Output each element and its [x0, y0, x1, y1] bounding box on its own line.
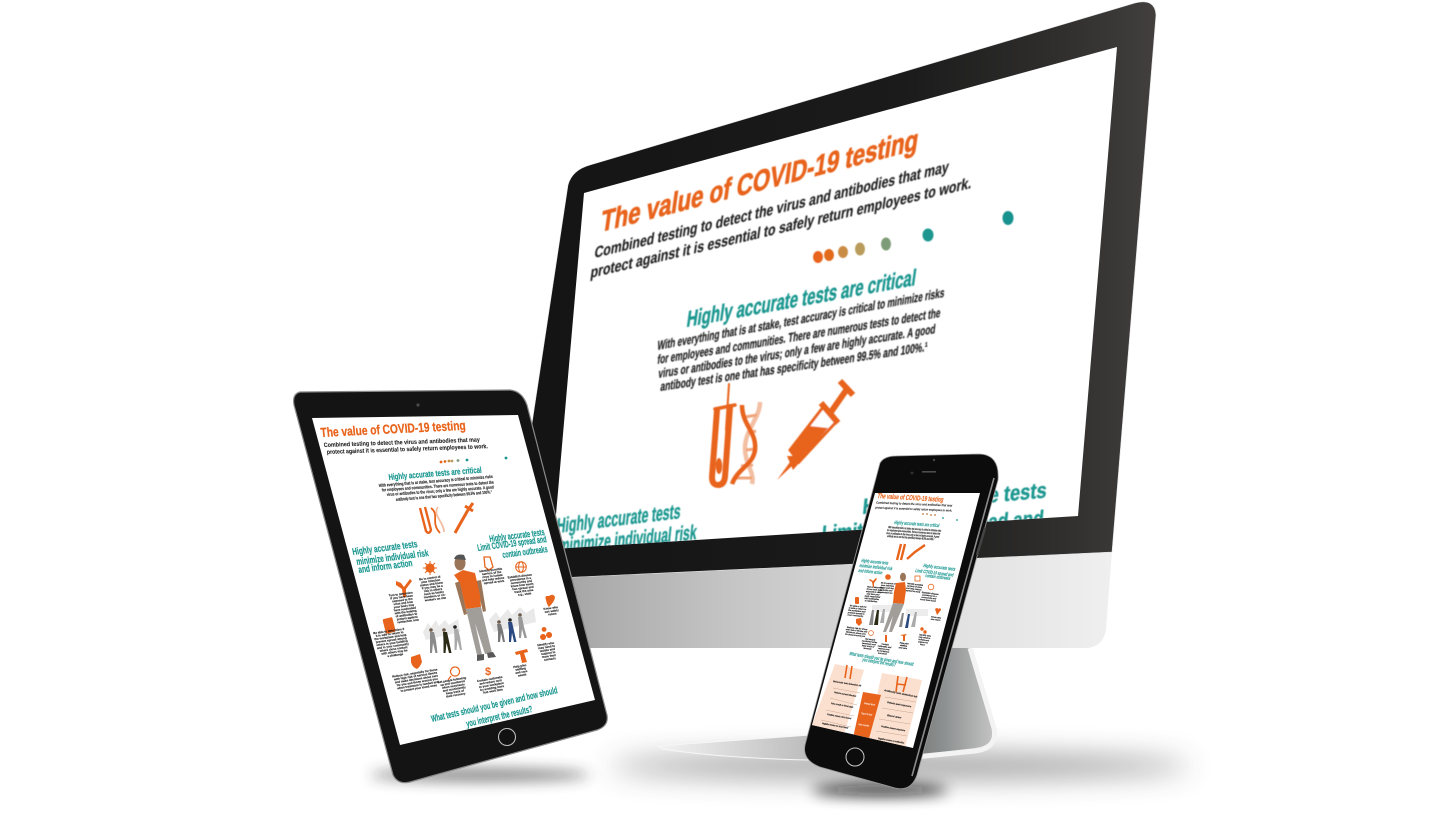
tablet text blocks: up and monitored: [440, 679, 465, 687]
heading: limit spread: [822, 483, 1047, 532]
table text lines: Molecular test detection kit: [833, 680, 862, 687]
tablet text blocks: for you and those around you: [396, 677, 438, 687]
tablet text blocks: when treatment is needed and: [396, 680, 439, 690]
tablet text blocks: Know who: [543, 605, 559, 611]
table text lines: Negative means no virus found: [822, 722, 849, 730]
tablet dots: [440, 457, 507, 463]
phone speaker and camera: [911, 459, 936, 474]
centre column labels: Type of test: [861, 712, 873, 717]
phone small people: [869, 609, 917, 628]
phone text blocks: your community: [847, 613, 864, 618]
tablet city skyline: [423, 607, 536, 640]
heading: minimize individual risk: minimize individual risk: [558, 521, 698, 558]
tablet body paragraph: With everything that is at stake, test accuracy is critical to minimize risks: [378, 474, 494, 488]
tablet icons: [382, 557, 555, 680]
phone text blocks: Identify possible: [907, 582, 924, 587]
monitor screen content: [556, 123, 1048, 558]
phone heading left: [857, 558, 893, 576]
tablet text blocks: has spread and: [512, 585, 534, 591]
phone text blocks: prevalence in a: [922, 593, 938, 598]
tablet text blocks: such as family: [423, 590, 445, 596]
phone text blocks: staffing: [899, 644, 908, 648]
tablet text blocks: have responded: [393, 606, 417, 612]
phone text blocks: if you have been: [866, 589, 883, 592]
phone bottom question: you interpret the results?: [861, 657, 896, 669]
phone heading right: contain outbreaks: [924, 573, 951, 582]
icon: building: [382, 617, 396, 634]
tablet text blocks: by avoiding more: [480, 684, 505, 692]
tablet text blocks: to your workplace: [478, 681, 505, 689]
phone title: The value of COVID-19 testing: [877, 492, 944, 504]
phone text blocks: monitored when: [861, 639, 878, 644]
phone text blocks: Establish disease: [921, 591, 940, 596]
tablet text blocks: staffing: [515, 666, 526, 672]
phone text blocks: [844, 581, 942, 656]
phone text blocks: isolate and: [918, 638, 930, 642]
icon: magnifier: [448, 667, 460, 680]
tablet text blocks: [372, 567, 560, 699]
tablet screen: [312, 415, 595, 745]
tablet text blocks: protect against: [396, 615, 418, 621]
phone text blocks: prevent spread in: [847, 611, 866, 616]
phone text blocks: exposed to virus: [865, 590, 883, 594]
tablet heading critical: Highly accurate tests are critical: [388, 465, 482, 482]
tablet bottom question: you interpret the results?: [465, 704, 534, 730]
tablet text blocks: where close contact: [378, 645, 408, 653]
tablet subtitle: protect against it is essential to safely return employees to work.: [327, 443, 488, 456]
centre column labels: Test results: [858, 723, 870, 728]
phone text blocks: decisions about care: [845, 630, 867, 636]
tablet heading right: Limit COVID-19 spread and: [476, 534, 548, 553]
table text lines: [822, 680, 918, 745]
tablet text blocks: the workplace and help: [374, 633, 407, 641]
icon: sample collection: [484, 557, 493, 570]
centre column labels: [858, 702, 876, 728]
tablet text blocks: with high risk of serious illness: [392, 671, 438, 682]
phone body paragraph: virus or antibodies to the virus; only a few are highly accurate. A good: [886, 531, 940, 539]
tablet text blocks: with others may be: [380, 648, 408, 656]
phone side highlight: [912, 478, 994, 776]
phone text blocks: to reinfection: [864, 599, 878, 603]
phone text blocks: support to: [918, 640, 929, 645]
tablet camera: [416, 403, 420, 407]
icon: DNA helix: [732, 402, 760, 484]
body paragraph: virus or antibodies to the virus; only a few are highly accurate. A good: [658, 321, 936, 381]
tablet text blocks: Identify who: [537, 641, 555, 647]
phone person: [883, 573, 906, 632]
right test column: [866, 673, 922, 752]
phone text blocks: can return: [930, 618, 941, 622]
icon: heart: [545, 595, 555, 607]
tablet text blocks: if you may be a: [421, 584, 443, 590]
phone text blocks: with antibodies: [864, 597, 880, 601]
tablet text blocks: Test to determine: [388, 590, 414, 598]
tablet text blocks: carriers of the: [481, 570, 502, 576]
tablet body: [294, 390, 607, 783]
tablet text blocks: isolate and: [539, 647, 556, 653]
tablet text blocks: trace their: [541, 653, 557, 659]
phone subtitle: Combined testing to detect the virus and antibodies that may: [876, 501, 953, 508]
phone bottom question: [848, 651, 914, 669]
tablet screen content: [320, 418, 560, 730]
tablet heading right: contain outbreaks: [501, 544, 548, 560]
phone text blocks: Know who: [931, 616, 942, 620]
tablet text blocks: contacts: [543, 656, 557, 662]
tablet text blocks: your body may: [393, 603, 415, 609]
monitor chin: [556, 550, 1112, 648]
phone text blocks: carriers of virus: [906, 584, 923, 589]
tablet text blocks: their recovery: [446, 691, 466, 699]
phone icons: [855, 574, 941, 642]
tablet text blocks: and consistently: [442, 685, 466, 693]
subtitle: Combined testing to detect the virus and antibodies that may: [593, 158, 950, 262]
body paragraph: With everything that is at stake, test accuracy is critical to minimize risks: [657, 285, 945, 353]
phone text blocks: Be in control of: [880, 581, 896, 586]
monitor screen: [553, 47, 1117, 549]
phone body: [805, 454, 998, 789]
tablet text blocks: needs: [517, 672, 527, 678]
tablet text blocks: status and know: [420, 581, 444, 587]
tablet text blocks: to protect your loved ones: [400, 683, 438, 693]
phone subtitle: [875, 501, 953, 513]
tablet text blocks: virus and how: [393, 600, 414, 606]
decorative dots row: [813, 211, 1014, 263]
phone text blocks: your infection: [880, 584, 895, 588]
phone text blocks: Contain: [881, 643, 890, 647]
phone text blocks: community and: [921, 596, 937, 601]
phone text blocks: may need to: [918, 636, 931, 640]
tablet heading right: [477, 529, 548, 558]
tablet text blocks: a challenge: [387, 652, 404, 658]
icon: antibody: [396, 579, 412, 597]
tablet: [294, 390, 607, 783]
phone text blocks: spread at work: [906, 589, 921, 594]
table icons: [845, 665, 907, 692]
tablet text blocks: prevalence in a: [510, 576, 532, 582]
heading: minimize individual risk: [557, 504, 698, 548]
tablet title: The value of COVID-19 testing: [320, 418, 466, 440]
phone heading right: Highly accurate tests: [922, 563, 956, 573]
phone text blocks: Be able to tell if it: [849, 604, 867, 609]
icon: test tube with swab: [712, 384, 735, 485]
shadows under devices: [370, 755, 1190, 796]
centre column labels: Detection: [864, 702, 876, 707]
tablet text blocks: virus to isolate: [482, 573, 503, 579]
tablet text blocks: Be in control of: [419, 575, 441, 581]
tablet text blocks: return: [548, 611, 557, 617]
tablet text blocks: Identify possible: [479, 567, 503, 573]
monitor bezel: [531, 2, 1156, 578]
icon: tools: [515, 649, 528, 663]
tablet bottom question: [430, 685, 559, 730]
tablet text blocks: Be able to determine if: [373, 627, 405, 635]
table text lines: Detects past exposure: [887, 701, 912, 708]
monitor stand: [658, 640, 995, 760]
tablet text blocks: workers on site: [423, 596, 447, 602]
body paragraph: for employees and communities. There are numerous tests to detect the: [657, 305, 941, 367]
phone text blocks: and care: [898, 646, 908, 650]
phone text blocks: to workplace: [877, 649, 890, 654]
tablet heading left: [352, 541, 430, 573]
tablet body paragraph: virus or antibodies to the virus; only a few are highly accurate. A good: [386, 485, 494, 497]
phone text blocks: co-workers too: [878, 591, 894, 595]
phone text blocks: Reduce risk for those: [847, 626, 869, 631]
heading: limit spread: Highly accurate tests: [862, 478, 1048, 519]
tablet text blocks: with the making: [393, 609, 417, 616]
phone side button: [977, 528, 985, 555]
icon: dollar: $: [485, 666, 491, 678]
phone heading left: minimize individual risk: [858, 563, 893, 572]
table text lines: Negative means no antibodies: [878, 737, 905, 745]
phone text blocks: to family and: [880, 588, 893, 592]
title: The value of COVID-19 testing: [599, 123, 921, 239]
tablet text blocks: when necessary: [441, 682, 465, 690]
body paragraph: antibody test is one that has specificity between 99.5% and 100%.¹: [660, 339, 928, 394]
phone icon: syringe: [907, 545, 925, 559]
tablet text blocks: of antibodies to: [395, 612, 418, 618]
tablet text blocks: prevent spread among: [375, 636, 407, 644]
tablet text blocks: reinfection now: [397, 618, 420, 624]
phone text blocks: body responded: [864, 596, 881, 599]
phone text blocks: and how your: [866, 593, 880, 596]
table cell dividers: [821, 688, 916, 736]
tablet text blocks: risk to others: [423, 587, 443, 593]
tablet text blocks: e.g., state: [517, 591, 532, 597]
phone screen content: [810, 492, 958, 752]
tablet text blocks: spread at work: [483, 579, 505, 585]
tablet text blocks: and care: [515, 669, 528, 675]
icon: globe: [516, 562, 526, 572]
phone text blocks: outbreaks and: [877, 644, 892, 649]
phone home button: [846, 748, 864, 766]
table text lines: Blood draw: [887, 714, 902, 720]
tablet text blocks: others in your building: [376, 639, 408, 647]
tablet text blocks: keep track of: [446, 689, 464, 695]
tablet text blocks: can safely: [544, 608, 559, 614]
left test column: [810, 664, 864, 740]
tablet heading left: Highly accurate tests: [351, 539, 419, 558]
tablet small people: [429, 613, 527, 653]
phone text blocks: status and risk: [879, 586, 895, 590]
tablet text blocks: and help reduce: [482, 576, 505, 582]
tablet text blocks: members or co-: [423, 593, 446, 599]
icon: syringe: [777, 381, 853, 480]
tablet text blocks: Establish disease: [507, 573, 533, 579]
phone text blocks: Test to determine: [867, 585, 885, 590]
tablet person: [454, 554, 496, 661]
tablet text blocks: lost work time: [483, 687, 504, 695]
phone heading right: Limit COVID-19 spread and: [914, 568, 954, 579]
tablet text blocks: support to: [541, 650, 556, 656]
tablet subtitle: [324, 437, 488, 456]
tablet text blocks: community and: [510, 579, 533, 585]
icon: virus: [423, 561, 437, 575]
tablet body paragraph: for employees and communities. There are numerous tests to detect the: [381, 480, 495, 492]
centre orange column: [853, 692, 881, 742]
phone text blocks: lost work: [878, 652, 888, 656]
phone skyline: [872, 605, 928, 616]
tablet heading left: minimize individual risk: [355, 548, 430, 568]
phone text blocks: recovery: [863, 647, 873, 651]
tablet subtitle: Combined testing to detect the virus and antibodies that may: [324, 437, 481, 449]
tablet text blocks: Help plan: [513, 663, 527, 669]
phone icon: tube, DNA: [897, 544, 905, 560]
table text lines: Detects current infection: [834, 691, 857, 698]
tablet icon: tube and DNA: [420, 507, 444, 533]
phone text blocks: Identify who: [919, 633, 932, 638]
phone heading left: and inform action: [857, 568, 883, 576]
phone text blocks: is safe to return to: [848, 606, 867, 611]
tablet text blocks: Get people following: [437, 676, 467, 684]
phone text blocks: necessary and: [861, 642, 877, 646]
phone heading right: [914, 563, 956, 582]
tablet text blocks: and reduce cost: [479, 678, 502, 686]
phone heading critical: Highly accurate tests are critical: [894, 520, 940, 529]
phone body paragraph: antibody test is one that has specificity between 99.5% and 100%.¹: [887, 534, 935, 541]
phone text blocks: Get people: [865, 637, 877, 642]
tablet icon: syringe: [455, 503, 473, 533]
phone body paragraph: [886, 525, 942, 541]
tablet bottom question: What tests should you be given and how should: [430, 685, 559, 725]
tablet text blocks: Reduce risk, especially for those: [392, 667, 438, 679]
tablet text blocks: and make decisions about care: [394, 674, 439, 684]
phone body paragraph: With everything that is at stake, test accuracy is critical to minimize risks: [888, 525, 942, 533]
tablet text blocks: it is safe to return to: [375, 630, 404, 638]
tablet text blocks: your infection: [420, 578, 441, 584]
tablet heading left: and inform action: [357, 558, 414, 576]
monitor: [531, 2, 1156, 648]
tablet text blocks: may need to: [538, 644, 556, 650]
tablet text blocks: track the area: [514, 588, 534, 594]
phone text blocks: the workplace and: [848, 609, 867, 614]
phone text blocks: for those around you: [845, 633, 866, 638]
table text lines: Nose, mouth or throat swab: [831, 702, 854, 709]
phone text blocks: know how much: [920, 599, 937, 603]
tablet home button: [498, 728, 516, 746]
phone body paragraph: for employees and communities. There are numerous tests to detect the: [887, 528, 941, 536]
heading: tests are critical: Highly accurate tests are critical: [685, 264, 918, 332]
phone: [805, 454, 998, 789]
icon: people network: [540, 627, 552, 640]
body paragraph: [657, 285, 945, 394]
phone text blocks: keep track of: [861, 644, 875, 649]
tablet text blocks: know how much: [510, 582, 534, 588]
table text lines: Positive means exposure: [881, 725, 906, 732]
tablet body paragraph: [378, 474, 495, 502]
tablet text blocks: and in your community: [376, 642, 410, 650]
phone heading left: Highly accurate tests: [860, 558, 889, 567]
tablet heading right: Highly accurate tests: [488, 527, 545, 544]
table text lines: Antibody test detection kit: [884, 689, 918, 699]
phone table: [810, 664, 922, 752]
phone text blocks: reduce cost: [878, 647, 890, 651]
phone text blocks: Help plan: [899, 642, 910, 646]
tablet body paragraph: antibody test is one that has specificity between 99.5% and 100%.¹: [395, 489, 492, 502]
phone dots: [922, 513, 958, 521]
phone text blocks: with risk of illness and: [845, 628, 868, 634]
heading: limit spread: Limit COVID-19 spread and: [821, 506, 1045, 546]
tablet text blocks: exposed to the: [392, 597, 413, 603]
table text lines: Positive means virus found: [827, 713, 852, 720]
tablet text blocks: if you have been: [390, 594, 414, 600]
heading: minimize individual risk: Highly accurate tests: [556, 500, 682, 538]
subtitle: protect against it is essential to safely return employees to work.: [589, 174, 973, 282]
phone bottom question: What tests should you be given and how should: [848, 651, 914, 668]
icon: shield: [411, 654, 422, 669]
phone subtitle: protect against it is essential to safely return employees to work.: [875, 506, 953, 513]
tablet text blocks: Contain outbreaks: [476, 675, 503, 683]
phone text blocks: trace: [920, 643, 926, 647]
phone screen: [812, 493, 980, 748]
phone text blocks: and help reduce: [906, 587, 923, 592]
